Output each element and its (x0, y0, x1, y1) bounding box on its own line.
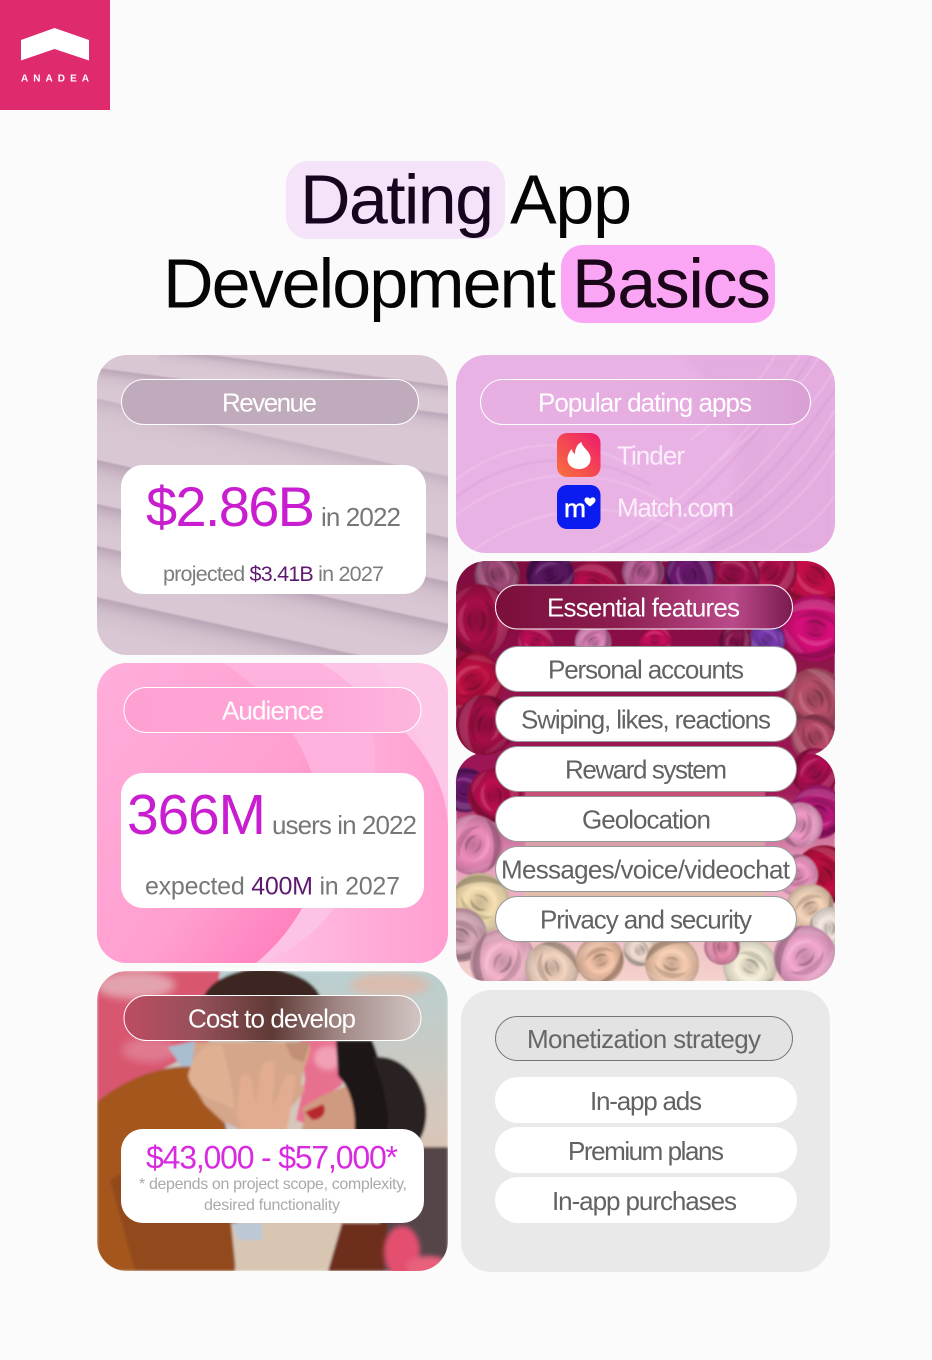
panel: monetization strategy (461, 990, 830, 1272)
card: cost figures: $43,000 - $57,000* (146, 1140, 398, 1176)
hair and hat (334, 1041, 392, 1129)
title (163, 160, 775, 323)
icon: Match.com: m (564, 495, 586, 523)
item: privacy and security (496, 896, 796, 942)
woman's face (300, 1086, 357, 1129)
card: cost figures: desired functionality (204, 1197, 340, 1214)
heading pill: essential features: Essential features (547, 592, 740, 622)
photo: couple (95, 969, 450, 1278)
item: in-app purchases (495, 1177, 797, 1223)
item: premium plans: Premium plans (568, 1136, 724, 1166)
item: geolocation: Geolocation (582, 804, 711, 834)
item: premium plans (495, 1127, 797, 1173)
card: revenue figures: projected $3.41B in 2027 (163, 562, 384, 586)
item: in-app ads: In-app ads (590, 1086, 702, 1116)
item: messages/voice/videochat (496, 846, 796, 892)
card: audience figures: users in 2022 (272, 810, 417, 840)
panel: revenue (97, 355, 448, 655)
heading pill: cost to develop: Cost to develop (188, 1004, 356, 1034)
item: in-app ads (495, 1077, 797, 1123)
item: swiping, likes, reactions: Swiping, likes, reactions (521, 704, 771, 734)
panel: audience (97, 663, 448, 963)
heading pill: audience (124, 688, 421, 732)
card: cost figures (121, 1129, 424, 1223)
card: audience figures: 366M (127, 783, 266, 847)
item: personal accounts: Personal accounts (548, 654, 744, 684)
floral background (456, 561, 836, 981)
heading pill: revenue: Revenue (222, 388, 317, 418)
panel: essential features (456, 561, 836, 981)
heading pill: monetization strategy (496, 1016, 792, 1060)
heading pill: monetization strategy: Monetization strategy (527, 1024, 761, 1054)
item: swiping, likes, reactions (496, 696, 796, 742)
title: Basics (572, 244, 771, 322)
hand (237, 1062, 295, 1129)
icon: Match.com (557, 485, 600, 529)
heading pill: audience: Audience (222, 696, 324, 726)
item: in-app purchases: In-app purchases (552, 1186, 737, 1216)
title: App (510, 160, 632, 238)
card: revenue figures (121, 465, 426, 594)
logo: Anadea: ANADEA (21, 74, 89, 84)
heading pill: popular dating apps: Popular dating apps (538, 388, 752, 418)
card: cost figures: * depends on project scope, complexity, (139, 1176, 407, 1193)
label: Tinder: Tinder (617, 440, 685, 470)
heading pill: popular dating apps (480, 380, 810, 424)
card: revenue figures: $2.86B (146, 475, 315, 538)
item: reward system (496, 746, 796, 792)
item: messages/voice/videochat: Messages/voice/videochat (501, 854, 791, 884)
icon: Tinder (557, 433, 600, 477)
heading pill: cost to develop (124, 996, 421, 1040)
label: Match.com: Match.com (617, 492, 734, 522)
panel: popular dating apps (456, 355, 835, 553)
card: audience figures: expected 400M in 2027 (145, 872, 400, 900)
item: reward system: Reward system (565, 754, 727, 784)
item: privacy and security: Privacy and security (540, 904, 752, 934)
title: Dating (300, 160, 494, 238)
item: geolocation (496, 796, 796, 842)
title: Development (163, 244, 556, 322)
card: revenue figures: in 2022 (321, 502, 401, 532)
logo: Anadea (0, 0, 110, 110)
card: audience figures (121, 773, 424, 908)
heading pill: revenue (122, 380, 418, 424)
heading pill: essential features (496, 585, 792, 629)
panel: cost to develop (95, 969, 450, 1278)
item: personal accounts (496, 646, 796, 692)
man's jacket (97, 1067, 240, 1271)
